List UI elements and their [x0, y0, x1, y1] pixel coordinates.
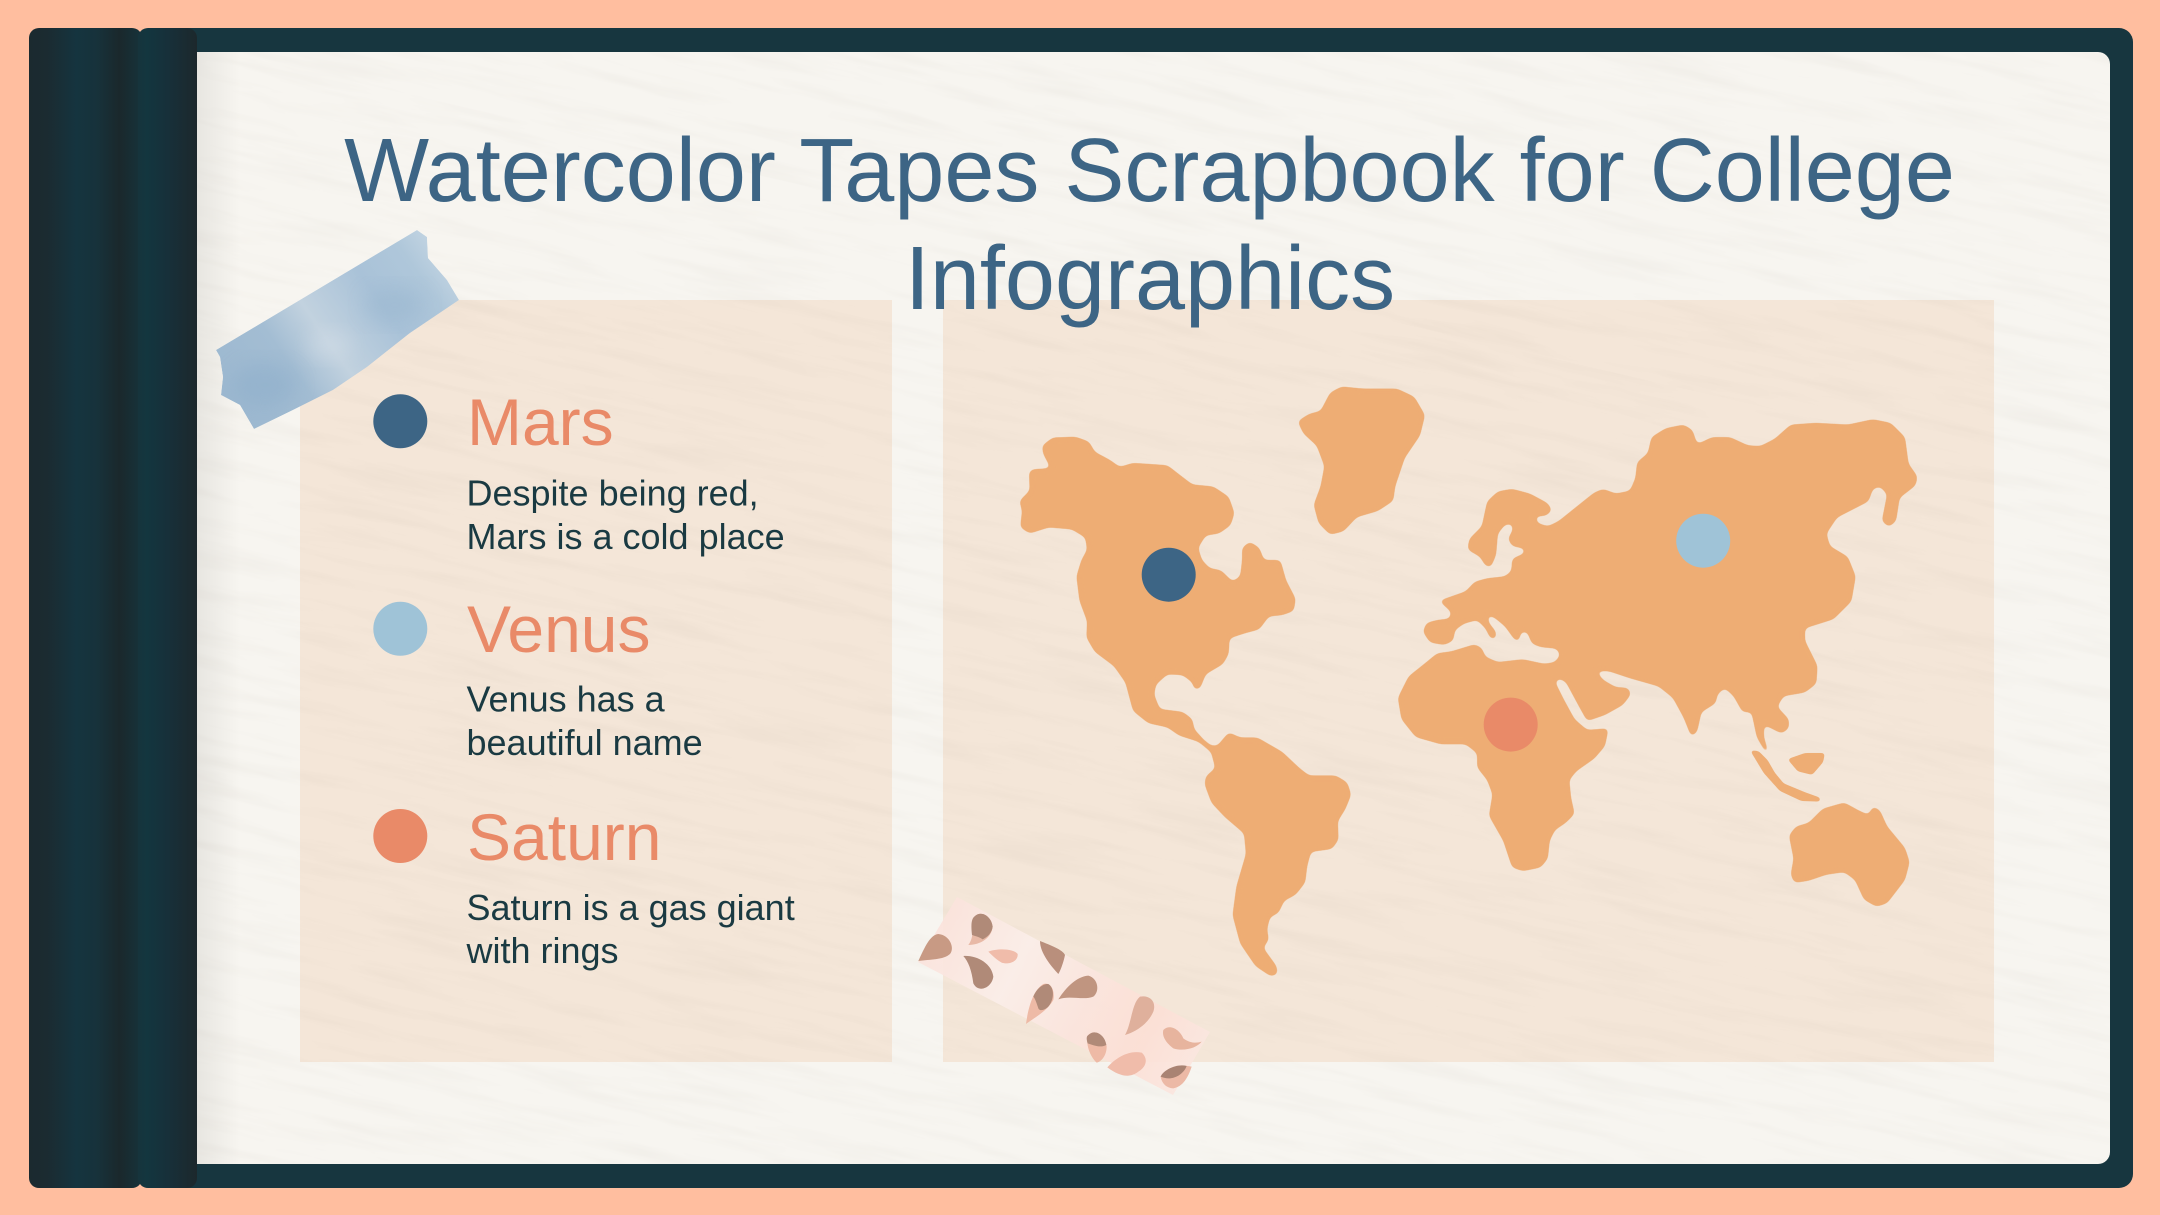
legend item: Venus	[373, 592, 703, 763]
washi tape: blue watercolor	[216, 230, 459, 429]
title: Infographics	[905, 229, 1395, 329]
spine: inner fold	[138, 28, 197, 1188]
title	[344, 121, 1955, 329]
continents	[1019, 387, 1917, 976]
map pin: Saturn	[1484, 698, 1538, 752]
book spine	[29, 28, 197, 1188]
legend item: Saturn	[373, 800, 795, 971]
legend item: Mars	[373, 385, 785, 557]
panel: map background	[943, 300, 1994, 1062]
legend item: Saturn: Saturn	[467, 800, 661, 874]
legend list	[373, 385, 795, 971]
spine: outer fold	[29, 28, 142, 1188]
legend item: Mars: Despite being red,	[466, 473, 759, 514]
legend item: Mars: Mars	[467, 385, 614, 459]
legend item: Saturn: with rings	[466, 930, 619, 971]
legend item: Venus: Venus	[467, 592, 650, 666]
map pin: Venus	[1676, 514, 1730, 568]
title: Watercolor Tapes Scrapbook for College	[344, 121, 1955, 221]
legend item: Mars: Mars is a cold place	[466, 516, 785, 557]
world map	[1019, 387, 1917, 976]
legend item: Venus: Venus has a	[466, 679, 666, 720]
panel: legend background	[300, 300, 892, 1062]
map pin: Mars	[1142, 548, 1196, 602]
tape drops	[918, 914, 1202, 1088]
washi tape: pink with drops	[918, 897, 1210, 1095]
legend item: Venus: beautiful name	[466, 722, 703, 763]
legend item: Saturn: Saturn is a gas giant	[466, 887, 795, 928]
